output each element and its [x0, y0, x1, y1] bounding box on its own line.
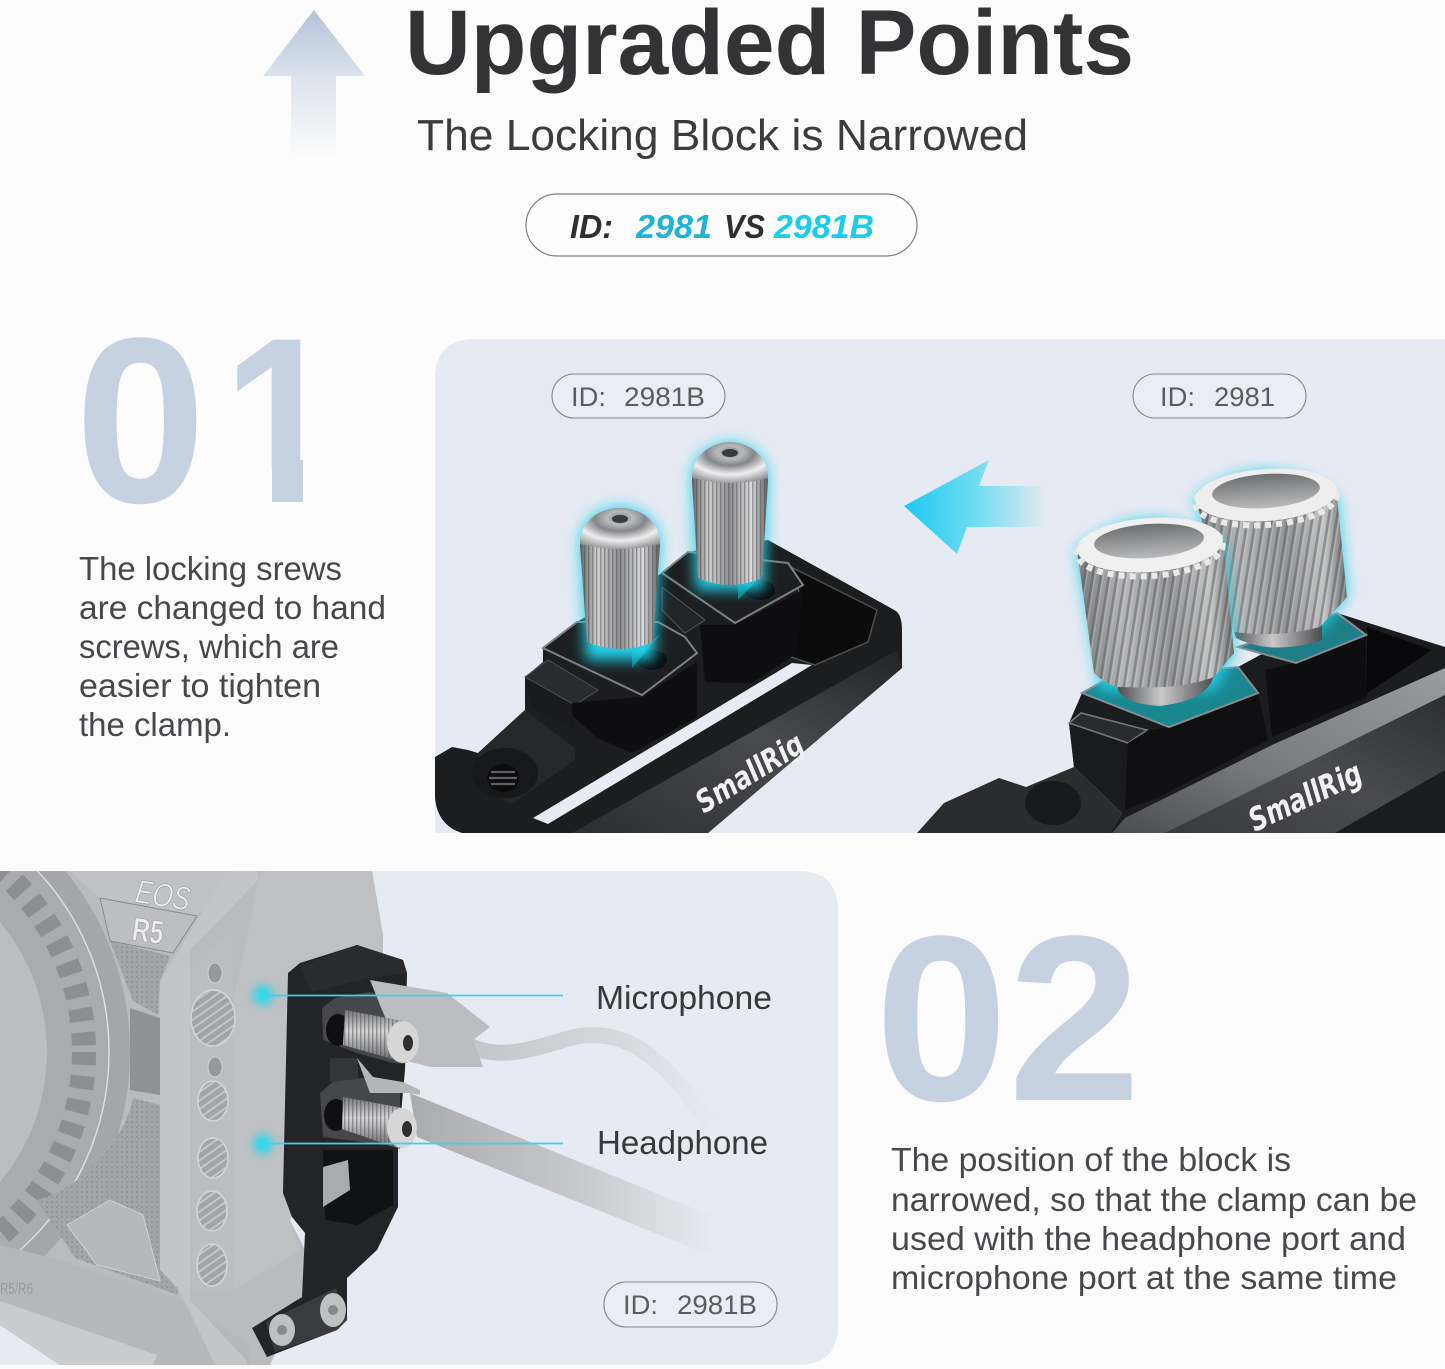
bottom mounting hole — [479, 748, 538, 798]
front block — [572, 662, 697, 753]
microphone connector — [370, 980, 490, 1067]
subtitle: The Locking Block is Narrowed — [417, 111, 1028, 160]
version comparison pill: ID: — [570, 208, 613, 245]
lower hand screw — [342, 1097, 417, 1149]
front block — [1125, 693, 1268, 810]
product: 2981 clamp with wide knurled screws — [917, 464, 1445, 839]
number 01: 0 — [75, 289, 206, 553]
callout: headphone port — [252, 1133, 563, 1155]
panel: ports view — [0, 871, 838, 1365]
front screw — [580, 508, 660, 649]
text block: point 02: used with the headphone port and — [891, 1220, 1406, 1257]
rear block — [700, 590, 803, 683]
grey patch behind window — [323, 1160, 350, 1207]
label: microphone: Microphone — [596, 979, 772, 1016]
lens white line — [0, 787, 109, 1317]
rear screw — [1193, 464, 1347, 648]
logo: SmallRig — [689, 726, 811, 821]
camera silhouette — [0, 871, 383, 1365]
lens cap — [0, 849, 47, 1255]
tab — [525, 677, 575, 730]
pocket — [790, 566, 878, 666]
camera model text: EOS — [133, 872, 193, 918]
logo: SmallRig — [1242, 754, 1368, 839]
base plate — [0, 1245, 250, 1365]
clamp body underlay — [1069, 613, 1445, 833]
version comparison pill — [526, 194, 917, 256]
cage screw holes — [191, 990, 235, 1286]
black clamp — [252, 945, 407, 1357]
camera and cage — [0, 766, 383, 1365]
label pill: ID 2981B: 2981B — [624, 382, 705, 412]
lens mount block — [130, 1008, 160, 1095]
number 01 — [84, 337, 303, 504]
version comparison pill: 2981 — [635, 208, 712, 245]
text block: point 01: The locking srews — [79, 550, 342, 587]
label pill: ID 2981B — [604, 1282, 777, 1327]
rear plate — [1238, 613, 1366, 663]
clamp recess — [323, 1150, 393, 1225]
text block: point 02: narrowed, so that the clamp can be — [891, 1181, 1417, 1218]
label pill: ID 2981: 2981 — [1214, 382, 1275, 412]
icon: upgrade arrow — [263, 10, 365, 155]
screw recesses — [326, 1014, 350, 1046]
base engraving: R5/R6 — [0, 1281, 33, 1298]
center block — [330, 1058, 358, 1082]
lens outer ring — [0, 766, 130, 1338]
label pill: ID 2981B: ID: — [623, 1290, 658, 1320]
mode dial — [67, 1200, 160, 1281]
left plate — [917, 767, 1122, 833]
clamp top bridge — [300, 945, 407, 992]
front screw glow — [580, 507, 660, 660]
rail — [0, 1301, 157, 1365]
text block: point 02 — [891, 1141, 1417, 1296]
lower plate — [320, 1077, 400, 1147]
front plate — [1082, 667, 1258, 727]
label pill: ID 2981: ID: — [1160, 382, 1195, 412]
camera model text — [130, 872, 193, 951]
number 01: 1 — [223, 289, 339, 553]
number 02: 02 — [875, 887, 1141, 1151]
version comparison pill: 2981B — [773, 208, 874, 245]
cage hole strip — [190, 930, 233, 1290]
side face — [572, 650, 902, 833]
callout: microphone port — [252, 984, 563, 1006]
cage right section — [233, 871, 383, 1290]
bottom clamp screws — [266, 1288, 347, 1352]
text block: point 01: are changed to hand — [79, 589, 386, 626]
label pill: ID 2981 — [1133, 374, 1306, 418]
rear block — [1265, 635, 1367, 737]
front screw — [1075, 513, 1234, 706]
text block: point 01 — [79, 550, 386, 743]
plate hole — [1025, 781, 1081, 825]
panel: screw comparison — [435, 339, 1445, 839]
front screw glow — [1077, 519, 1234, 690]
microphone cable — [473, 1027, 680, 1096]
lens teeth — [0, 812, 84, 1292]
product: 2981B clamp with thin hand screws — [435, 442, 902, 833]
camera model text: R5 — [130, 910, 166, 951]
small holes — [208, 963, 222, 1077]
label: headphone: Headphone — [597, 1124, 768, 1161]
cage upright — [160, 871, 258, 1365]
upper grip texture — [110, 941, 170, 1015]
lower grip texture — [37, 1098, 178, 1295]
text block: point 01: easier to tighten — [79, 667, 321, 704]
pocket — [1367, 627, 1432, 693]
label pill: ID 2981B — [552, 374, 725, 418]
version comparison pill: VS — [724, 208, 765, 245]
side strip — [1112, 668, 1445, 833]
headphone connector — [357, 1058, 420, 1095]
upper hand screw — [343, 1010, 419, 1063]
side face — [1165, 695, 1445, 833]
text block: point 02: microphone port at the same time — [891, 1259, 1397, 1296]
upper plate — [322, 992, 405, 1064]
rear screw — [692, 442, 768, 585]
top plate — [70, 871, 230, 916]
label pill: ID 2981B: 2981B — [677, 1290, 757, 1320]
rear screw glow — [1195, 471, 1347, 630]
front tab — [1069, 724, 1076, 768]
arrow: from 2981 to 2981B — [904, 460, 1046, 554]
rear screw glow — [692, 443, 768, 590]
left plate surface — [478, 710, 575, 804]
clamp body — [435, 540, 902, 833]
text block: point 02: The position of the block is — [891, 1141, 1291, 1178]
model badge — [100, 898, 197, 953]
slot — [533, 663, 812, 824]
headphone cable — [410, 1093, 690, 1246]
text block: point 01: the clamp. — [79, 706, 231, 743]
text block: point 01: screws, which are — [79, 628, 339, 665]
label pill: ID 2981B: ID: — [571, 382, 606, 412]
